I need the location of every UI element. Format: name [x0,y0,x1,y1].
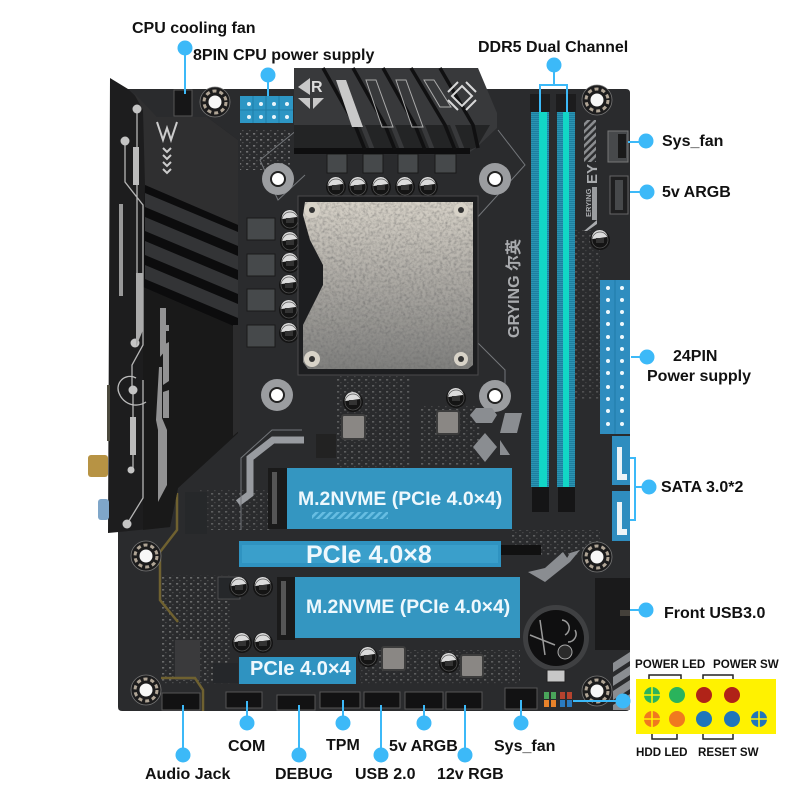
callout: SATA 3.0*2: SATA 3.0*2 [661,479,744,496]
bottom callout: Sys_fan [494,700,555,755]
callout: DDR5 Dual Channel [478,39,628,112]
callout: Front USB3.0: Front USB3.0 [664,605,765,622]
VRM top chokes [327,154,456,173]
chevrons logo [528,550,580,582]
callout: Front USB3.0 [630,602,765,622]
yellow pinout panel [636,679,776,734]
board silkscreen lettering: EY [584,164,601,184]
overlay: M.2 NVMe slot 2: M.2NVME (PCIe 4.0×4) [306,596,510,618]
pinout labels: POWER SW [713,658,779,671]
board silkscreen lettering: ERYING [584,188,593,217]
inductors [342,411,483,677]
callout: Sys_fan right: Sys_fan [662,133,723,150]
pinout labels: POWER LED [635,658,705,671]
top VRM heatsink: R [311,79,323,96]
callout: 24PIN Power supply: Power supply [647,368,751,385]
callout: DDR5 Dual Channel: DDR5 Dual Channel [478,39,628,56]
board silkscreen lettering: GRYING 尔英 [505,239,523,338]
board PCB [118,89,630,711]
callout: 5v ARGB right [630,184,731,201]
highlight: 8PIN CPU power [240,96,293,123]
screw holes [131,85,612,706]
PCB component clusters [160,130,600,685]
overlay: PCIe 4.0x4 slot: PCIe 4.0×4 [250,658,352,680]
bottom callout: Audio Jack [145,705,230,783]
bottom callout: 5v ARGB: 5v ARGB [389,738,458,755]
bottom callout: Audio Jack: Audio Jack [145,766,230,783]
pinout leader line [573,694,630,708]
M.2 connector sockets [268,468,295,640]
left I/O heatsink [108,78,240,533]
callout: CPU cooling fan [132,20,256,94]
callout: 24PIN Power supply: 24PIN [673,348,717,365]
callout: 8PIN CPU power supply: 8PIN CPU power supply [193,47,374,64]
callout: 24PIN Power supply [631,348,751,385]
overlay: M.2 NVMe slot 1: M.2NVME (PCIe 4.0×4) [298,488,502,510]
5v ARGB connector top [610,176,628,214]
bottom callout: USB 2.0: USB 2.0 [355,766,416,783]
callout: SATA 3.0*2 [630,458,744,520]
bottom callout: DEBUG: DEBUG [275,766,333,783]
callout: 5v ARGB right: 5v ARGB [662,184,731,201]
bottom callout: COM [228,701,265,755]
highlight: SATA ports [612,436,630,541]
bottom callout: 5v ARGB [389,705,458,755]
callout: CPU cooling fan: CPU cooling fan [132,20,256,37]
USB3 connector [595,578,630,650]
callout: 8PIN CPU power supply [193,47,374,96]
bottom callout: TPM [326,700,360,754]
front panel pinout callout [573,658,779,759]
bottom headers [162,688,537,710]
CPU fan connector [174,90,192,116]
pinout labels [635,658,779,759]
board edge chevrons [613,652,630,710]
CPU integrated heat spreader [303,202,473,369]
bottom callout: 12v RGB [437,705,504,783]
gold trace [160,493,203,711]
motherboard [88,68,630,711]
callout: Sys_fan right [628,133,723,150]
overlay: M.2 NVMe slot 1 [287,468,512,529]
bottom callout: USB 2.0 [355,705,416,783]
pinout labels: HDD LED [636,746,688,759]
bottom callout: DEBUG [275,705,333,783]
Sys_fan connector top [608,131,628,162]
CPU socket frame [298,196,478,375]
overlay: PCIe 4.0x8 slot: PCIe 4.0×8 [306,541,432,569]
board silkscreen lettering [505,120,601,338]
bottom callout: TPM: TPM [326,737,360,754]
CMOS battery [523,605,589,682]
pinout labels: RESET SW [698,746,759,759]
highlight: 24PIN power [600,280,630,434]
overlay: PCIe 4.0x8 slot [239,541,541,569]
X logo [470,408,522,462]
front panel pins [544,692,572,707]
heat spreader screws [304,202,468,367]
top VRM heatsink [294,68,497,154]
bottom callout: COM: COM [228,738,265,755]
pinout brackets [649,675,733,739]
overlay: M.2 NVMe slot 2 [295,577,520,638]
bottom callout: 12v RGB: 12v RGB [437,766,504,783]
bottom callout: Sys_fan: Sys_fan [494,738,555,755]
pinout dots [644,687,767,727]
VRM left chokes [247,218,275,347]
thin board outlines [241,130,525,530]
capacitors [229,176,610,673]
mounting holes [261,163,511,412]
silver board trace [238,440,304,503]
DIMM slots [530,94,576,512]
rear ports [88,385,110,520]
